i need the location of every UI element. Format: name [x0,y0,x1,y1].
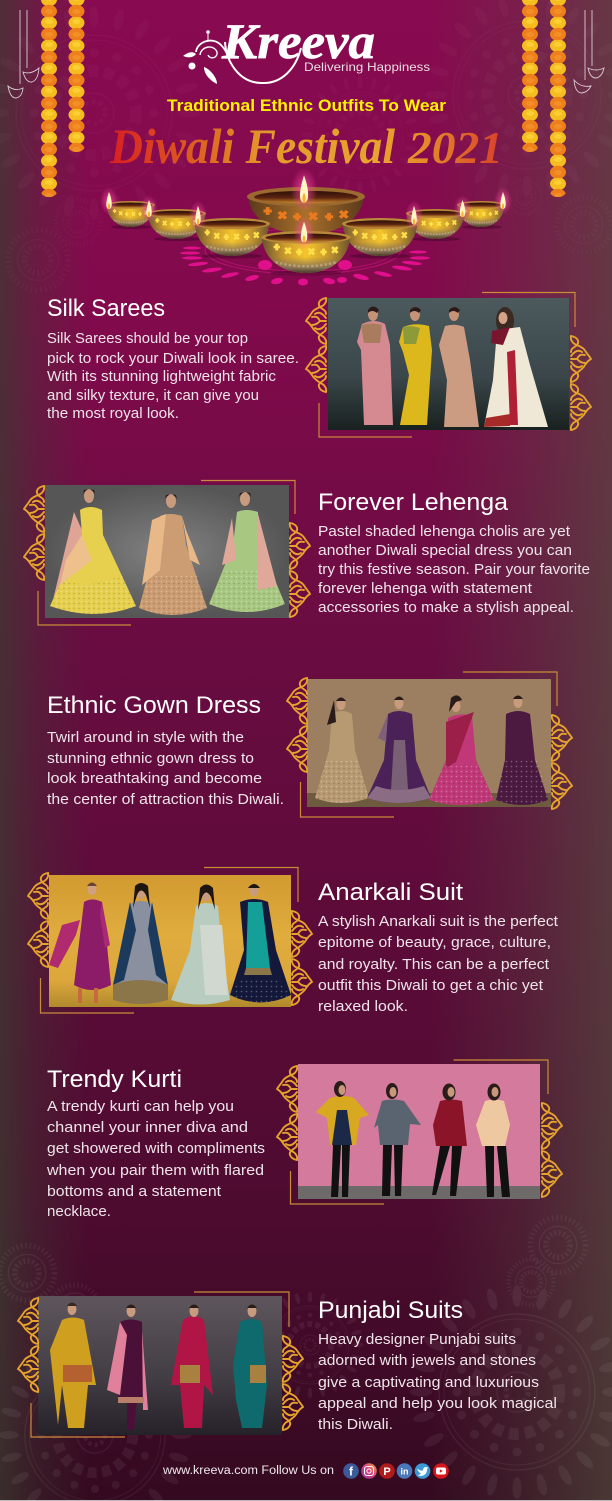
photo: punjabi suits [38,1296,282,1435]
lamp shadows [111,225,502,276]
body text [46,1099,265,1220]
lamp flames [100,167,512,249]
top background mandalas [0,0,612,290]
main title: 2021 [407,122,503,173]
body text: outfit this Diwali to get a chic yet [318,978,543,994]
body text: A trendy kurti can help you [47,1099,234,1115]
body text: Silk Sarees should be your top [47,331,248,347]
footer [162,1463,449,1479]
photo frame and ornaments [24,480,310,625]
heading: Anarkali Suit [318,879,463,906]
body text: Heavy designer Punjabi suits [318,1332,516,1348]
rangoli under lamps [180,226,430,286]
body text [47,331,299,422]
body text: stunning ethnic gown dress to [47,751,254,767]
body text: the most royal look. [47,406,179,422]
body text: give a captivating and luxurious [318,1375,539,1391]
logo flourish [183,30,301,84]
heading: Trendy Kurti [47,1066,182,1093]
photo frame and ornaments [277,1060,562,1204]
body text: epitome of beauty, grace, culture, [318,935,551,951]
garlands [40,0,567,197]
photo frame and ornaments [306,292,591,437]
body text: the center of attraction this Diwali. [47,792,284,808]
body text [318,914,558,1015]
body text [318,1332,557,1433]
main title: Diwali Festival [109,118,395,174]
icon: twitter [415,1463,430,1479]
photo frame and ornaments [287,672,572,817]
heading: Forever Lehenga [318,489,509,516]
body text: try this festive season. Pair your favorite [318,562,590,578]
footer text: www.kreeva.com Follow Us on [162,1465,334,1477]
subtitle: Traditional Ethnic Outfits To Wear [167,96,446,115]
body text: pick to rock your Diwali look in saree. [47,351,299,367]
icon: pinterest: P [383,1466,391,1478]
icon: facebook: f [349,1464,354,1478]
body text: another Diwali special dress you can [318,543,572,559]
section: Forever Lehenga [24,480,590,625]
photo: kurtis [298,1064,540,1199]
body text: appeal and help you look magical [318,1396,557,1412]
bottom background mandalas [0,1218,612,1501]
section: Trendy Kurti [46,1060,562,1220]
hanging diyas [8,10,604,98]
garland: inner right [521,0,539,152]
garland: far left [40,0,58,197]
body text: accessories to make a stylish appeal. [318,600,574,616]
body text: look breathtaking and become [47,771,262,787]
photo: silk sarees [328,298,569,430]
body text: relaxed look. [318,999,408,1015]
garland: inner left [68,0,86,152]
logo [183,13,430,84]
body text: Twirl around in style with the [47,730,244,746]
body text: adorned with jewels and stones [318,1353,536,1369]
diya lamps [100,167,512,273]
photo: lehenga [45,485,289,618]
logo tagline: Delivering Happiness [304,60,430,74]
icon: instagram [361,1463,377,1479]
body text: when you pair them with flared [46,1163,264,1179]
section: Ethnic Gown Dress [47,672,572,817]
body text: With its stunning lightweight fabric [47,369,276,385]
social icons [343,1463,449,1479]
section: Anarkali Suit [28,868,558,1015]
body text [318,524,590,616]
heading: Silk Sarees [47,295,165,322]
body text: A stylish Anarkali suit is the perfect [318,914,558,930]
body text: and silky texture, it can give you [47,388,259,404]
body text: bottoms and a statement [47,1184,221,1200]
photo: anarkali [49,875,291,1007]
heading: Ethnic Gown Dress [47,692,261,719]
body text: get showered with compliments [47,1141,265,1157]
body text: and royalty. This can be a perfect [318,957,549,973]
photo frame and ornaments [18,1292,303,1437]
body text: forever lehenga with statement [318,581,532,597]
body text: Pastel shaded lehenga cholis are yet [318,524,570,540]
section: Punjabi Suits [18,1292,557,1437]
photo frame and ornaments [28,868,312,1013]
body text: necklace. [47,1204,111,1220]
body text [47,730,284,808]
heading: Punjabi Suits [318,1297,463,1324]
body text: this Diwali. [318,1417,393,1433]
body text: channel your inner diva and [47,1120,248,1136]
garland: far right [549,0,567,197]
section: Silk Sarees [47,292,591,437]
photo: gowns [307,679,551,807]
icon: youtube [433,1463,449,1479]
icon: linkedin: in [400,1466,408,1476]
logo wordmark: Kreeva [221,13,375,69]
